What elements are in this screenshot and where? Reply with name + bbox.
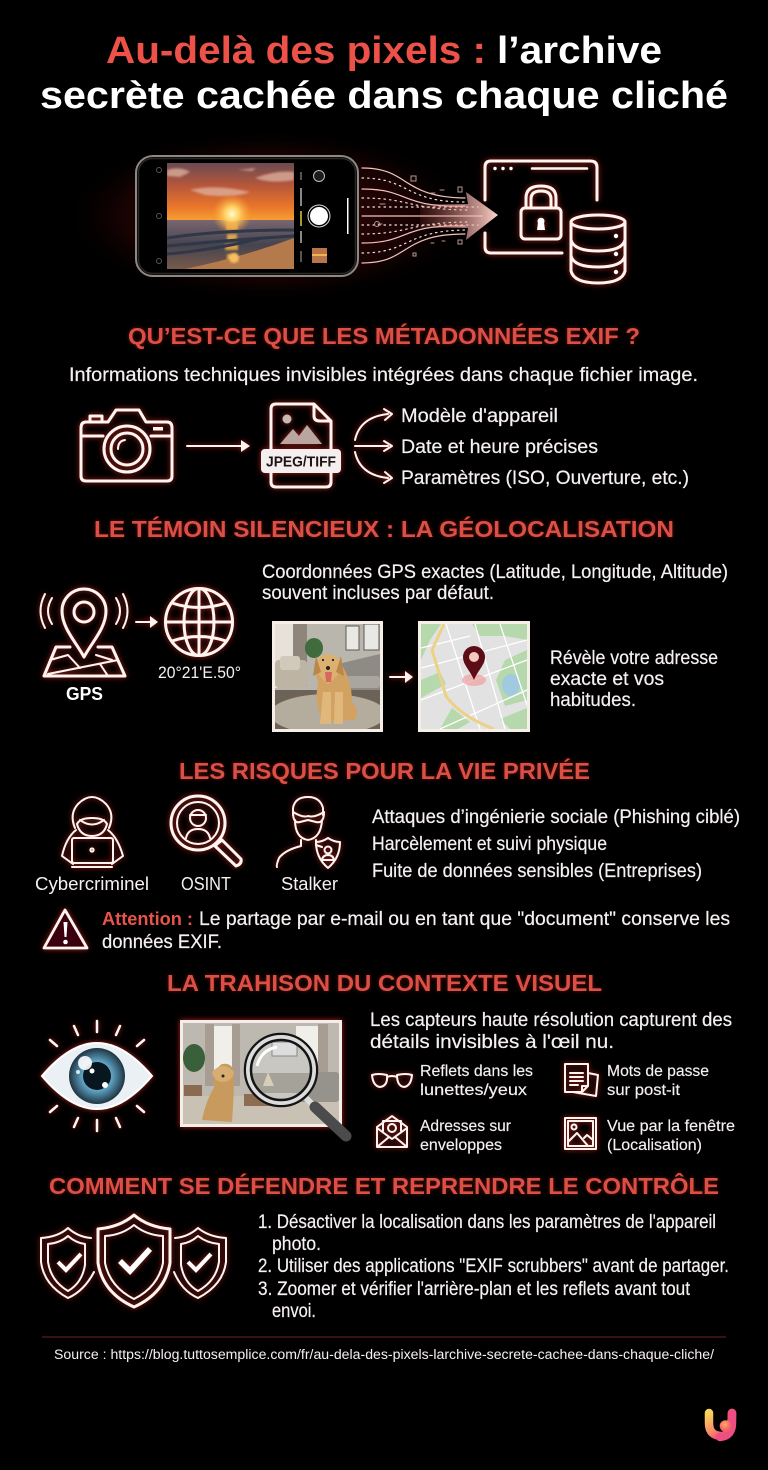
item: view through the window: Vue par la fenêtre	[607, 1118, 735, 1135]
visual context panel	[42, 1010, 735, 1154]
text: high-resolution sensors: détails invisibles à l'œil nu.	[370, 1032, 614, 1053]
icon: three shields	[41, 1215, 226, 1307]
icon: OSINT magnifier	[171, 796, 241, 866]
icon: browser window with padlock	[485, 161, 597, 253]
icon: stalker with shield	[277, 797, 340, 868]
EXIF diagram	[81, 404, 689, 489]
item: reflections in glasses: lunettes/yeux	[420, 1082, 527, 1099]
list: EXIF fields: Modèle d'appareil	[401, 406, 558, 427]
callout: EXIF kept when sharing	[102, 909, 730, 953]
text: map reveals	[550, 648, 718, 711]
arrow: GPS to globe	[136, 616, 158, 628]
section heading: privacy risks: LES RISQUES POUR LA VIE PRIVÉE	[179, 757, 590, 784]
item: passwords on post-it: sur post-it	[607, 1082, 681, 1099]
icon: left shield	[41, 1228, 94, 1298]
text: high-resolution sensors: Les capteurs haute résolution capturent des	[370, 1010, 732, 1031]
risks panel	[35, 796, 740, 953]
callout: EXIF kept when sharing: données EXIF.	[102, 932, 222, 953]
hero illustration: photo data flowing to locked database	[96, 143, 631, 289]
item: passwords on post-it	[565, 1063, 709, 1099]
geolocation panel	[40, 562, 728, 734]
label: GPS: GPS	[66, 684, 103, 704]
icon: center shield	[98, 1215, 170, 1307]
callout: EXIF kept when sharing: Attention :	[102, 909, 193, 929]
defence panel	[41, 1212, 729, 1322]
branching arrows	[355, 409, 392, 483]
title	[40, 30, 728, 117]
icon: camera	[81, 410, 172, 481]
section heading: geolocation: LE TÉMOIN SILENCIEUX : LA GÉOLOCALISATION	[94, 515, 674, 542]
icon: warning triangle	[44, 910, 87, 948]
label: coordinates: 20°21'E.50°	[158, 663, 241, 682]
icon: globe	[166, 588, 232, 656]
list: privacy risks: Harcèlement et suivi physique	[372, 834, 607, 855]
item: reflections in glasses: Reflets dans les	[420, 1063, 533, 1080]
item: addresses on envelopes: Adresses sur	[420, 1118, 512, 1135]
hero glow	[60, 128, 480, 304]
text: map reveals: Révèle votre adresse	[550, 648, 718, 669]
text: EXIF definition: Informations techniques invisibles intégrées dans chaque fichier image.	[69, 365, 698, 386]
item: view through the window	[565, 1118, 735, 1154]
image: room photo under magnifying glass	[180, 1020, 342, 1127]
icon: cybercriminal hacker	[62, 797, 123, 867]
icon: eye	[42, 1021, 152, 1131]
icon: right shield	[174, 1228, 226, 1298]
list: defence steps	[258, 1212, 729, 1322]
data stream arrow	[362, 168, 498, 263]
callout: EXIF kept when sharing: Le partage par e-mail ou en tant que "document" conserve les	[199, 909, 730, 930]
label: JPEG/TIFF: JPEG/TIFF	[266, 454, 336, 470]
list: privacy risks	[372, 807, 740, 882]
list: privacy risks: Attaques d’ingénierie sociale (Phishing ciblé)	[372, 807, 740, 828]
section heading: visual context: LA TRAHISON DU CONTEXTE VISUEL	[167, 970, 602, 996]
list: EXIF fields: Paramètres (ISO, Ouverture, etc.)	[401, 468, 689, 489]
item: view through the window: (Localisation)	[607, 1137, 702, 1154]
item: reflections in glasses	[372, 1063, 533, 1099]
label: Stalker: Stalker	[281, 874, 338, 894]
title: l’archive	[497, 30, 662, 72]
title: Au-delà des pixels :	[106, 30, 486, 72]
label: OSINT: OSINT	[181, 874, 231, 894]
icon: smartphone with sunset photo	[136, 156, 358, 276]
title: secrète cachée dans chaque cliché	[40, 75, 728, 117]
item: addresses on envelopes: enveloppes	[420, 1137, 502, 1154]
icon: JPEG/TIFF file	[261, 404, 341, 487]
list: EXIF fields	[401, 406, 689, 489]
section heading: defence: COMMENT SE DÉFENDRE ET REPRENDRE LE CONTRÔLE	[49, 1172, 719, 1199]
list: defence steps: photo.	[272, 1234, 321, 1255]
list: EXIF fields: Date et heure précises	[401, 437, 598, 458]
arrow: photo to map	[390, 671, 413, 683]
image: map with location pin	[418, 621, 530, 732]
text: map reveals: exacte et vos	[550, 669, 664, 690]
list: defence steps: 3. Zoomer et vérifier l'arrière-plan et les reflets avant tout	[258, 1279, 691, 1300]
icon: database cylinder	[571, 215, 625, 283]
logo	[709, 1413, 732, 1437]
label: Cybercriminel: Cybercriminel	[35, 874, 149, 894]
text: map reveals: habitudes.	[550, 690, 636, 711]
text: GPS coordinates	[262, 562, 728, 604]
image: dog in living room	[270, 621, 386, 734]
text: GPS coordinates: Coordonnées GPS exactes (Latitude, Longitude, Altitude)	[262, 562, 728, 583]
list: privacy risks: Fuite de données sensibles (Entreprises)	[372, 861, 702, 882]
text: high-resolution sensors	[370, 1010, 732, 1053]
icon: magnifying glass	[245, 1034, 346, 1136]
item: passwords on post-it: Mots de passe	[607, 1063, 709, 1080]
icon: GPS pin on map	[40, 589, 128, 676]
text: GPS coordinates: souvent incluses par défaut.	[262, 583, 494, 604]
list: defence steps: 1. Désactiver la localisation dans les paramètres de l'appareil	[258, 1212, 716, 1233]
list: defence steps: envoi.	[272, 1301, 316, 1322]
section heading: EXIF: QU’EST-CE QUE LES MÉTADONNÉES EXIF ?	[128, 322, 640, 349]
item: addresses on envelopes	[377, 1116, 512, 1154]
source line: Source : https://blog.tuttosemplice.com/fr/au-dela-des-pixels-larchive-secrete-cachee-dans-chaque-cliche/	[54, 1347, 714, 1362]
arrow: camera to file	[187, 440, 250, 452]
